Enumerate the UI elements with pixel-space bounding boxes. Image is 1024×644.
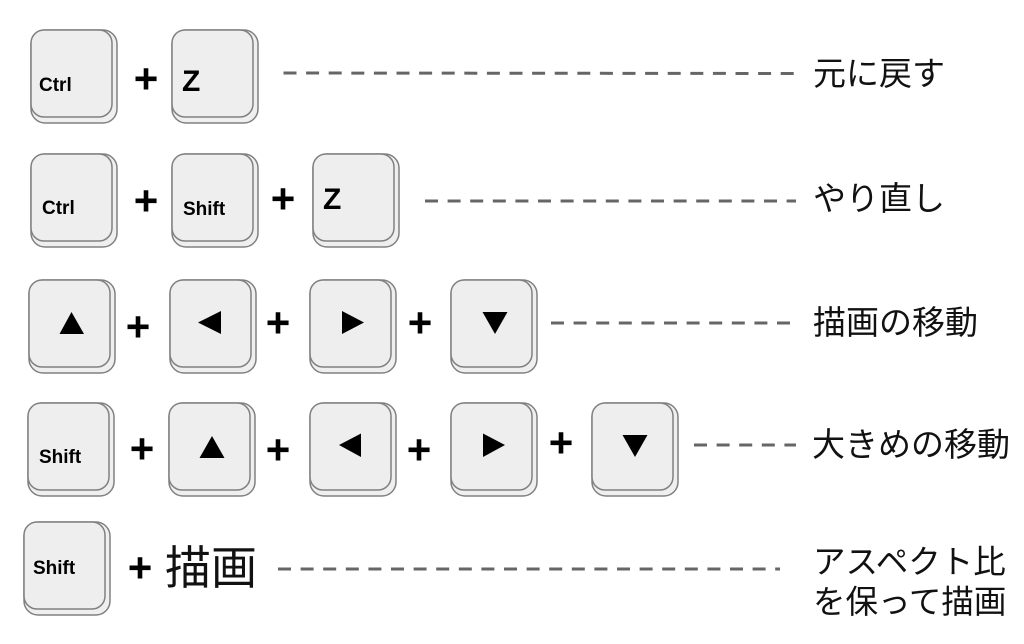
plus sign: + [549, 419, 573, 466]
plus sign: + [130, 425, 154, 472]
label: move drawing: 描画の移動 [813, 304, 978, 341]
plus sign: + [128, 544, 152, 591]
plus sign: + [407, 426, 431, 473]
key: Shift: Shift [33, 558, 76, 579]
key: up arrow [169, 403, 255, 496]
key: Shift [28, 403, 114, 496]
label: large move: 大きめの移動 [812, 426, 1010, 463]
key: Shift: Shift [183, 199, 226, 220]
key: down arrow [592, 403, 678, 496]
dashed connector [284, 72, 796, 75]
key: Ctrl [31, 30, 117, 123]
key: up arrow [29, 280, 115, 373]
label: undo: 元に戻す [813, 55, 945, 92]
key: left arrow [170, 280, 256, 373]
key: Z: Z [182, 65, 200, 98]
dashed connector [551, 322, 797, 324]
label: draw keeping aspect ratio: アスペクト比 [813, 544, 1006, 580]
plus sign: + [408, 299, 432, 346]
key: Ctrl: Ctrl [42, 198, 75, 219]
key: Shift: Shift [39, 447, 82, 468]
key: Z [313, 154, 399, 247]
plus sign: + [271, 175, 295, 222]
row 1: undo shortcut [31, 30, 945, 123]
row 2: redo shortcut [31, 154, 945, 247]
plus sign: + [134, 177, 158, 224]
row 3: move drawing shortcut [29, 280, 978, 373]
plus sign: + [266, 426, 290, 473]
key: Ctrl [31, 154, 117, 247]
label: second line: を保って描画 [813, 584, 1006, 620]
label: redo: やり直し [813, 180, 945, 217]
dashed connector [278, 568, 780, 570]
key: Shift [24, 522, 110, 615]
key: down arrow [451, 280, 537, 373]
dashed connector [425, 200, 796, 202]
text: drawing: 描画 [165, 542, 257, 594]
key: right arrow [310, 280, 396, 373]
row 5: keep aspect ratio shortcut [24, 522, 1006, 620]
plus sign: + [126, 303, 150, 350]
key: right arrow [451, 403, 537, 496]
key: Shift [172, 154, 258, 247]
key: left arrow [310, 403, 396, 496]
key: Z [172, 30, 258, 123]
row 4: large move shortcut [28, 403, 1010, 496]
plus sign: + [266, 299, 290, 346]
key: Ctrl: Ctrl [39, 75, 72, 96]
key: Z: Z [323, 183, 341, 216]
plus sign: + [134, 55, 158, 102]
dashed connector [694, 444, 796, 446]
